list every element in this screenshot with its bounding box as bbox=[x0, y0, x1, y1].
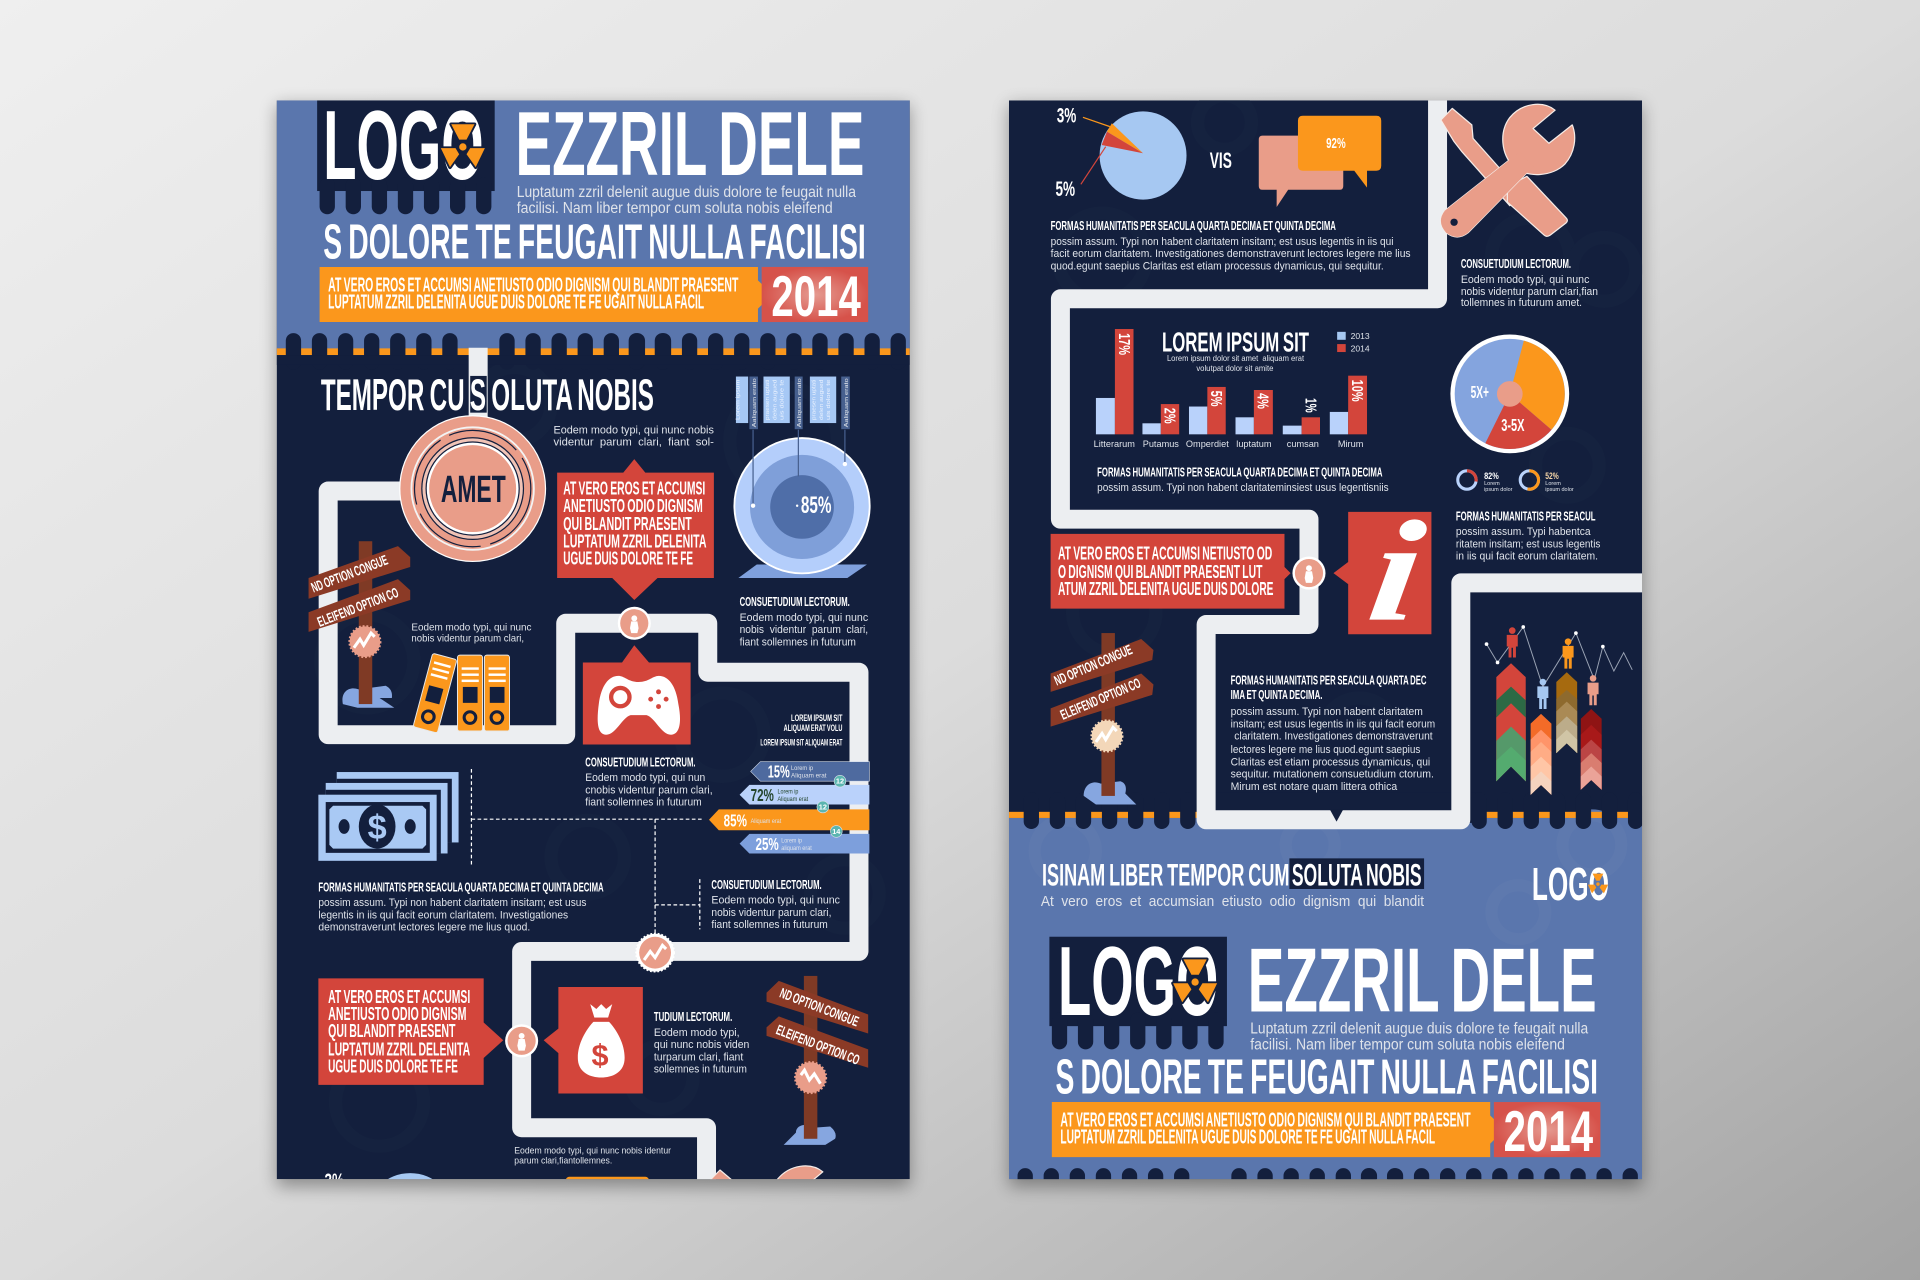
intro text: Luptatum zzril delenit augue duis dolore te feugait nulla bbox=[517, 184, 856, 201]
heading: TEMPOR CU S OLUTA NOBIS bbox=[321, 371, 654, 420]
signpost left: ND OPTION CONGUE bbox=[309, 552, 390, 595]
text block: quod.egunt saepius Claritas est etiam processus dynamicus, qui sequitur. bbox=[1051, 260, 1384, 272]
text block: IMA ET QUINTA DECIMA. bbox=[1231, 687, 1322, 702]
target chart: 85% bbox=[801, 492, 832, 519]
text block bbox=[740, 597, 868, 646]
ribbon bars: 12 bbox=[819, 802, 827, 811]
text block: possim assum. Typi non habent claritatem bbox=[1231, 706, 1423, 718]
icon: money bag: $ bbox=[591, 1038, 609, 1072]
bar chart: cumsan bbox=[1287, 439, 1319, 449]
text block bbox=[1051, 218, 1411, 272]
text block: Eodem modo typi, qui nunc bbox=[711, 895, 840, 907]
blue footer area bbox=[1009, 818, 1642, 1179]
signpost left: ELEIFEND OPTION CO bbox=[315, 584, 401, 630]
arrow column chart bbox=[1485, 625, 1632, 795]
donut stats: 82% bbox=[1484, 471, 1499, 481]
text block: FORMAS HUMANITATIS PER SEACULA QUARTA DEC bbox=[1231, 672, 1427, 687]
pie chart: 5% bbox=[1056, 178, 1075, 201]
legend text: LOREM IPSUM SIT bbox=[791, 713, 843, 723]
orange banner bbox=[320, 267, 773, 322]
red callout: AT VERO EROS ET ACCUMSI bbox=[328, 986, 470, 1007]
red callout: AT VERO EROS ET ACCUMSI bbox=[563, 478, 705, 499]
text block bbox=[1456, 508, 1601, 563]
icon: money bag bbox=[544, 987, 643, 1093]
footer subline: At vero eros et accumsian etiusto odio dignism qui blandit bbox=[1041, 894, 1424, 910]
text block: facit eorum claritatem. Investigationes demonstraverunt lectores legere me lius bbox=[1051, 248, 1411, 260]
chart title: Lorem ipsum dolor sit amet aliquam erat bbox=[1167, 353, 1305, 363]
pie chart bbox=[1056, 104, 1187, 201]
text block: FORMAS HUMANITATIS PER SEACUL bbox=[1456, 508, 1596, 523]
intro text bbox=[517, 184, 856, 217]
text block: in iis qui facit eorum claritatem. bbox=[1456, 551, 1598, 563]
percentage tags: Aaliquam erato bbox=[844, 378, 850, 427]
red callout: O DIGNISM QUI BLANDIT PRAESENT LUT bbox=[1058, 561, 1263, 582]
text block bbox=[1231, 672, 1435, 793]
ribbon bars: Lorem ip bbox=[791, 765, 814, 772]
bar chart: 2% bbox=[1160, 408, 1177, 424]
winding road bbox=[328, 348, 859, 1188]
bar chart: 1% bbox=[1301, 398, 1318, 413]
text block: CONSUETUDIUM LECTORUM. bbox=[1461, 256, 1571, 271]
text block bbox=[318, 879, 604, 934]
text block: FORMAS HUMANITATIS PER SEACULA QUARTA DECIMA ET QUINTA DECIMA bbox=[318, 879, 604, 894]
bar chart: Putamus bbox=[1143, 439, 1179, 449]
text block: sequitur. mutationem consuetudium ctorum. bbox=[1231, 769, 1434, 781]
text block bbox=[712, 880, 840, 928]
text block: FORMAS HUMANITATIS PER SEACULA QUARTA DECIMA ET QUINTA DECIMA bbox=[1051, 218, 1336, 233]
winding road bbox=[1060, 100, 1647, 820]
bar chart: 10% bbox=[1348, 380, 1365, 402]
logo tab bbox=[317, 90, 495, 214]
text block: turparum clari, fiant bbox=[654, 1051, 744, 1063]
text block bbox=[1461, 256, 1598, 309]
donut stats: 52% bbox=[1545, 471, 1559, 481]
icon: tools bbox=[1441, 104, 1575, 237]
text block: Mirum est notare quam littera othica bbox=[1231, 781, 1398, 793]
percentage tags: delen augued bbox=[772, 380, 778, 420]
text block: CONSUETUDIUM LECTORUM. bbox=[711, 877, 822, 892]
pie chart: 3% bbox=[1057, 104, 1076, 127]
text block: Eodem modo typi, qui nun bbox=[585, 772, 705, 784]
dashed connectors bbox=[471, 769, 704, 933]
target chart bbox=[733, 430, 871, 578]
title: EZZRIL DELE bbox=[516, 94, 864, 195]
donut stats: Lorem bbox=[1545, 481, 1561, 487]
donut stats: ipsum dolor bbox=[1484, 487, 1513, 493]
icon: game controller bbox=[583, 645, 691, 744]
ribbon bars bbox=[709, 762, 869, 854]
ribbon bars: Aliquam erat bbox=[778, 796, 808, 803]
speech bubbles bbox=[1259, 116, 1381, 207]
icon: money bbox=[318, 772, 459, 861]
orange banner: LUPTATUM ZZRIL DELENITA UGUE DUIS DOLORE TE FE UGAIT NULLA FACIL bbox=[328, 292, 704, 314]
header band bbox=[277, 100, 910, 355]
text block: tollemnes in futurum amet. bbox=[1461, 297, 1582, 309]
red callout: UGUE DUIS DOLORE TE FE bbox=[563, 547, 693, 568]
text block: possim assum. Typi non habent claritatem insitam; est usus bbox=[318, 897, 587, 909]
text block bbox=[654, 1009, 749, 1076]
donut stats: ipsum dolor bbox=[1545, 487, 1574, 493]
heading bbox=[321, 376, 653, 413]
chart title: volutpat dolor sit amite bbox=[1196, 363, 1274, 373]
red callout: ANETIUSTO ODIO DIGNISM bbox=[328, 1003, 467, 1024]
red callout: LUPTATUM ZZRIL DELENITA bbox=[328, 1039, 470, 1060]
text block: Eodem modo typi, qui nunc bbox=[1461, 274, 1590, 286]
footer teeth bbox=[1018, 1168, 1638, 1205]
text block: Claritas est etiam processus dynamicus, qui bbox=[1231, 756, 1430, 768]
red callout: QUI BLANDIT PRAESENT bbox=[563, 513, 692, 534]
orange banner bbox=[1052, 1102, 1505, 1157]
bar chart: 4% bbox=[1254, 393, 1271, 409]
text block: Eodem modo typi, qui nunc nobis bbox=[553, 424, 714, 436]
logo tab: LOGO bbox=[323, 90, 484, 200]
cut-off bottom row: 3% bbox=[324, 1170, 344, 1193]
orange banner: AT VERO EROS ET ACCUMSI ANETIUSTO ODIO DIGNISM QUI BLANDIT PRAESENT bbox=[328, 274, 739, 296]
signpost right: ND OPTION CONGUE bbox=[778, 985, 861, 1029]
red callout: UGUE DUIS DOLORE TE FE bbox=[328, 1056, 458, 1077]
intro text: facilisi. Nam liber tempor cum soluta nobis eleifend bbox=[1250, 1036, 1565, 1053]
text block: lectores legere me lius quod.egunt saepius bbox=[1231, 744, 1421, 756]
text block: videntur parum clari, fiant sol- bbox=[553, 437, 714, 449]
node: person bbox=[505, 1024, 538, 1057]
percentage tags: delen augued bbox=[819, 380, 825, 420]
text block: fiant sollemnes in futurum bbox=[585, 797, 702, 809]
red callout: ATUM ZZRIL DELENITA UGUE DUIS DOLORE bbox=[1058, 578, 1273, 599]
percentage tags bbox=[736, 377, 850, 429]
chart title bbox=[1162, 326, 1309, 373]
logo tab bbox=[1049, 926, 1227, 1049]
text block: fiant sollemnes in futurum bbox=[711, 919, 828, 931]
text block: Eodem modo typi, qui nunc bbox=[411, 623, 531, 634]
red callout: LUPTATUM ZZRIL DELENITA bbox=[563, 530, 707, 551]
percentage tags: Aaliquam erato bbox=[797, 378, 803, 427]
chart legend: 2013 bbox=[1351, 331, 1370, 341]
big pie chart: 3-5X bbox=[1501, 415, 1525, 435]
text block bbox=[1097, 464, 1389, 494]
text block bbox=[585, 758, 712, 806]
percentage tags: uis dolore te bbox=[780, 380, 786, 420]
panel: right poster bbox=[1009, 96, 1647, 1205]
text block: TUDIUM LECTORUM. bbox=[654, 1009, 732, 1024]
bar chart: 17% bbox=[1115, 333, 1132, 355]
bar chart: luptatum bbox=[1236, 439, 1272, 449]
node: person bbox=[618, 607, 651, 640]
text block bbox=[553, 424, 714, 449]
bar chart: Mirum bbox=[1338, 439, 1364, 449]
legend text: ALIQUAM ERAT VOLU bbox=[784, 723, 843, 733]
bar chart: Omperdiet bbox=[1186, 439, 1229, 449]
donut stats bbox=[1458, 471, 1574, 493]
label: VIS bbox=[1210, 148, 1232, 173]
red callout: AT VERO EROS ET ACCUMSI NETIUSTO OD bbox=[1058, 543, 1272, 564]
bar chart: 5% bbox=[1207, 391, 1224, 407]
big pie chart bbox=[1450, 335, 1569, 453]
year box bbox=[762, 266, 868, 322]
icon: info: i bbox=[1360, 491, 1433, 651]
footer heading: SOLUTA NOBIS bbox=[1292, 856, 1422, 892]
legend text bbox=[760, 713, 843, 748]
orange banner: LUPTATUM ZZRIL DELENITA UGUE DUIS DOLORE TE FE UGAIT NULLA FACIL bbox=[1060, 1127, 1435, 1149]
signpost left bbox=[309, 541, 410, 708]
speech bubbles: 92% bbox=[1326, 136, 1346, 152]
cut-off bottom row bbox=[325, 1165, 824, 1180]
year box: 2014 bbox=[771, 265, 861, 329]
small logo bbox=[1532, 858, 1609, 910]
text block: CONSUETUDIUM LECTORUM. bbox=[585, 755, 696, 770]
red callout: ANETIUSTO ODIO DIGNISM bbox=[563, 495, 703, 516]
red callout bbox=[318, 978, 503, 1085]
signpost right bbox=[767, 976, 868, 1145]
amet circle: AMET bbox=[441, 469, 506, 511]
text block: legentis in iis qui facit eorum claritatem. Investigationes bbox=[318, 909, 568, 921]
signpost right: ELEIFEND OPTION CO bbox=[774, 1021, 862, 1068]
ribbon bars: 12 bbox=[836, 777, 844, 786]
amet circle bbox=[400, 416, 546, 561]
text block: nobis videntur parum clari,fian bbox=[1461, 286, 1598, 298]
intro text bbox=[1250, 1020, 1589, 1053]
chart title: LOREM IPSUM SIT bbox=[1162, 326, 1309, 357]
icon: money: $ bbox=[368, 809, 387, 847]
title: EZZRIL DELE bbox=[1248, 930, 1597, 1031]
bar chart: Litterarum bbox=[1094, 439, 1135, 449]
node: trend bbox=[636, 934, 674, 972]
text block: Eodem modo typi, qui nunc bbox=[740, 612, 869, 624]
text block: Eodem modo typi, bbox=[654, 1027, 740, 1039]
text block: ritatem insitam; est usus legentis bbox=[1456, 538, 1601, 550]
ribbon bars: Aliquam erat bbox=[751, 818, 781, 825]
text block: nobis videntur parum clari, bbox=[711, 907, 831, 919]
text block: parum clari,fiantollemnes. bbox=[514, 1155, 612, 1165]
panel: left poster bbox=[277, 90, 910, 1280]
intro text: facilisi. Nam liber tempor cum soluta nobis eleifend bbox=[517, 200, 833, 217]
percentage tags: uis dolore te bbox=[826, 380, 832, 420]
text block: nobis videntur parum clari, bbox=[740, 624, 868, 636]
ribbon bars: Aliquam erat bbox=[791, 773, 827, 780]
bar chart bbox=[1094, 329, 1367, 449]
signpost: ELEIFEND OPTION CO bbox=[1058, 675, 1143, 723]
binders bbox=[413, 653, 510, 733]
subtitle: S DOLORE TE FEUGAIT NULLA FACILISI bbox=[323, 215, 866, 269]
road notch bbox=[1330, 809, 1343, 822]
year box: 2014 bbox=[1504, 1100, 1593, 1164]
percentage tags: Lorem ipsum bbox=[736, 379, 742, 420]
ribbon bars: 14 bbox=[832, 827, 841, 836]
node: person bbox=[1292, 557, 1326, 590]
logo tab: LOGO bbox=[1058, 926, 1218, 1036]
ribbon bars: 85% bbox=[724, 811, 747, 831]
text block: qui nunc nobis viden bbox=[654, 1039, 749, 1051]
ribbon bars: 25% bbox=[756, 834, 779, 854]
small logo: LOGO bbox=[1532, 858, 1609, 910]
ribbon bars: 15% bbox=[768, 762, 790, 782]
donut stats: Lorem bbox=[1484, 481, 1500, 487]
text block: CONSUETUDIUM LECTORUM. bbox=[740, 594, 850, 609]
signpost: ND OPTION CONGUE bbox=[1052, 641, 1135, 688]
percentage tags: praesen uptati bbox=[812, 380, 818, 420]
text block: demonstraverunt lectores legere me lius quod. bbox=[318, 922, 530, 934]
ribbon bars: Lorem ip bbox=[778, 788, 799, 795]
red callout bbox=[1051, 534, 1291, 609]
text block: claritatem. Investigationes demonstraverunt bbox=[1234, 731, 1433, 743]
percentage tags: Aaliquam erato bbox=[752, 378, 758, 427]
legend text: LOREM IPSUM SIT ALIQUAM ERAT bbox=[760, 738, 843, 748]
text block: possim assum. Typi habentca bbox=[1456, 526, 1591, 538]
text block: sollemnes in futurum bbox=[654, 1064, 747, 1076]
red callout bbox=[557, 459, 714, 600]
text block: insitam; est usus legentis in iis qui facit eorum bbox=[1231, 718, 1435, 730]
red callout: QUI BLANDIT PRAESENT bbox=[328, 1020, 456, 1041]
text block: possim assum. Typi non habent claritatem insitam; est usus legentis in iis qui bbox=[1051, 236, 1393, 248]
percentage tags: praesen uptati bbox=[765, 380, 771, 420]
footer heading: ISINAM LIBER TEMPOR CUM bbox=[1042, 856, 1289, 892]
text block: Eodem modo typi, qui nunc nobis identur bbox=[514, 1145, 671, 1155]
text block: possim assum. Typi non habent claritateminsiest usus legentisniis bbox=[1097, 482, 1389, 494]
chart legend bbox=[1337, 331, 1370, 353]
chart legend: 2014 bbox=[1351, 343, 1370, 353]
intro text: Luptatum zzril delenit augue duis dolore te feugait nulla bbox=[1250, 1020, 1589, 1037]
signpost bbox=[1051, 633, 1153, 804]
text block: fiant sollemnes in futurum bbox=[740, 636, 856, 648]
text block: FORMAS HUMANITATIS PER SEACULA QUARTA DECIMA ET QUINTA DECIMA bbox=[1097, 464, 1382, 479]
ribbon bars: aliquam erat bbox=[781, 845, 812, 852]
ribbon bars: 72% bbox=[751, 785, 774, 805]
text block: cnobis videntur parum clari, bbox=[585, 784, 713, 796]
text block: nobis videntur parum clari, bbox=[411, 634, 524, 645]
big pie chart: 5X+ bbox=[1471, 382, 1489, 402]
text block bbox=[411, 623, 531, 645]
text block bbox=[514, 1145, 671, 1165]
ribbon bars: Lorem ip bbox=[781, 837, 803, 844]
orange banner: AT VERO EROS ET ACCUMSI ANETIUSTO ODIO DIGNISM QUI BLANDIT PRAESENT bbox=[1060, 1110, 1471, 1132]
